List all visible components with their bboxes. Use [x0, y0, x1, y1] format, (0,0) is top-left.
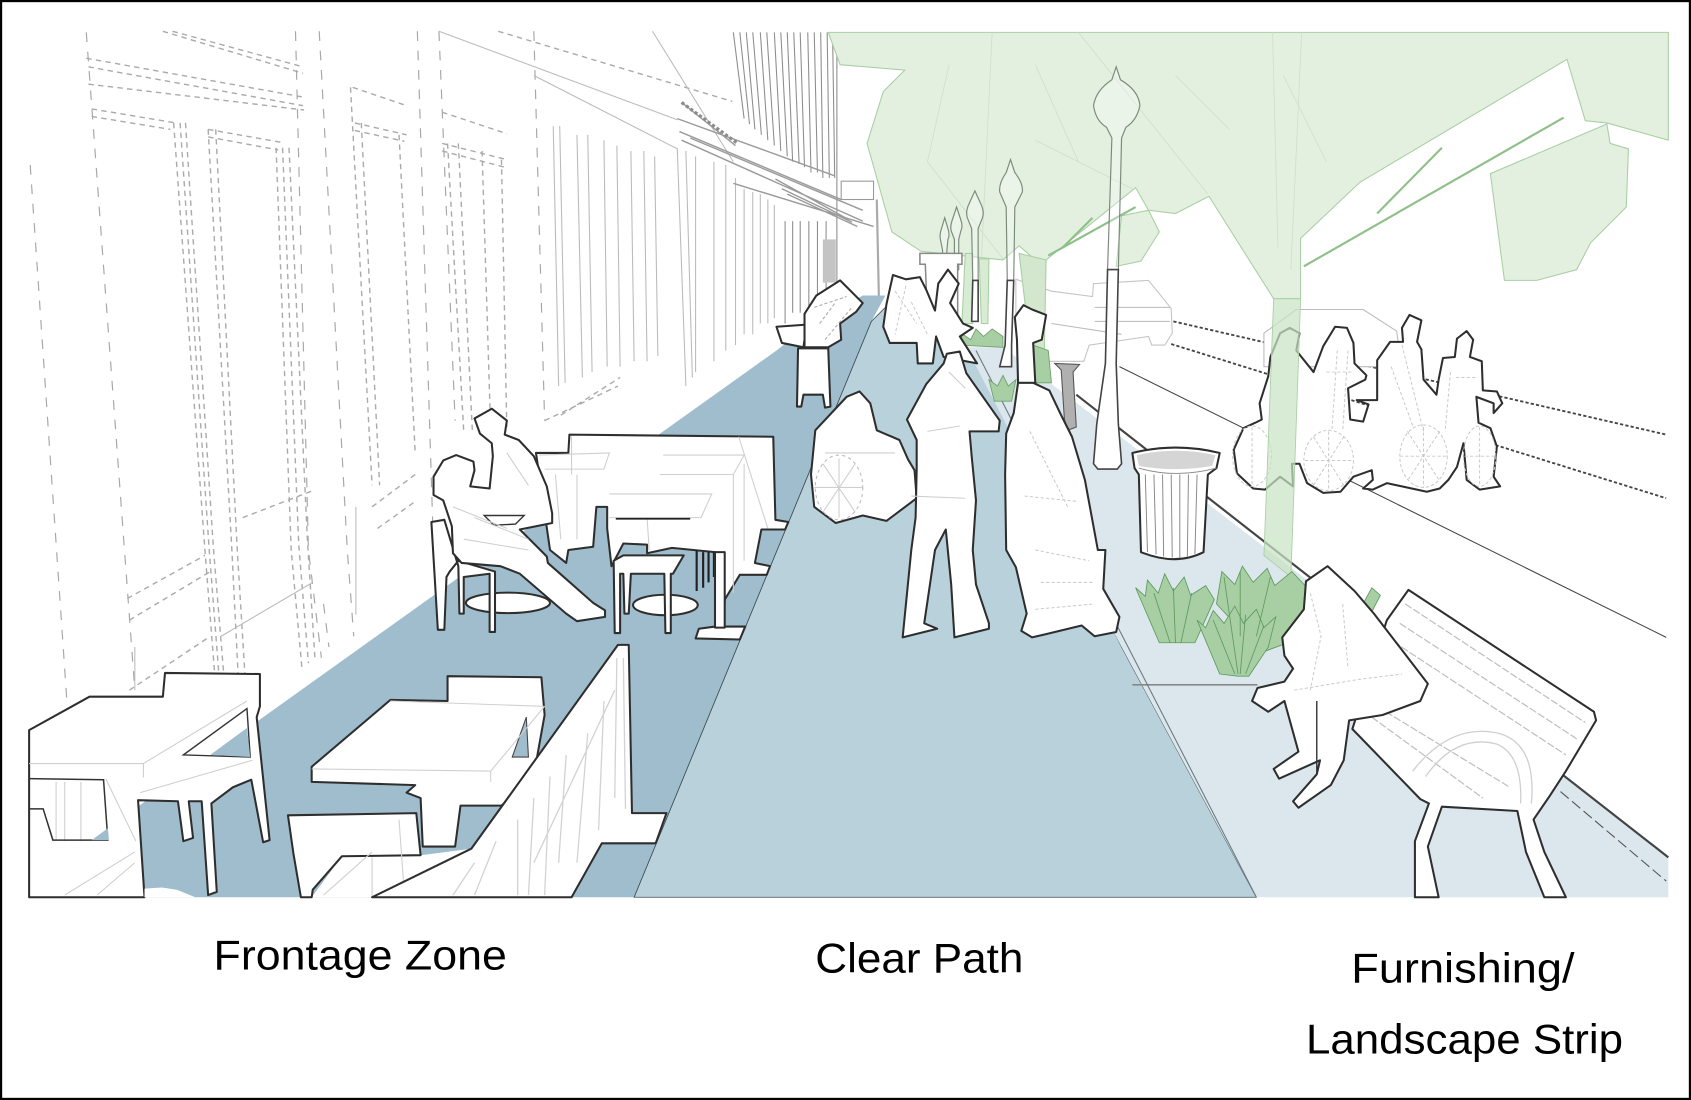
information kiosk [920, 253, 962, 318]
clear path ground [634, 307, 1256, 897]
roadway lane lines [1119, 321, 1666, 637]
outdoor table right with chairs [288, 676, 545, 897]
label: Furnishing / Landscape Strip: Furnishing/ [1351, 944, 1575, 991]
woman with stroller [1005, 383, 1119, 637]
cyclist group [1233, 315, 1502, 493]
person in wheelchair [811, 391, 917, 523]
cafe seating pair [431, 409, 605, 632]
cafe table barrier and furniture [536, 435, 788, 640]
distant pedestrians [776, 270, 977, 408]
label: Clear Path: Clear Path [815, 935, 1023, 982]
lamp posts lower [972, 270, 1122, 469]
tree canopies [828, 32, 1668, 372]
standing man [903, 352, 1000, 637]
label: Frontage Zone: Frontage Zone [214, 932, 507, 979]
tree trunk overlay [1264, 299, 1301, 577]
label: Furnishing / Landscape Strip [1306, 944, 1623, 1063]
bollard and bag [1055, 363, 1080, 430]
building facades [30, 31, 879, 755]
label: Furnishing / Landscape Strip: Landscape Strip [1306, 1016, 1623, 1063]
outdoor table left with chair [29, 673, 270, 897]
furnishing strip ground [966, 347, 1668, 897]
seated person on bench [1252, 566, 1428, 808]
glass cafe barrier [372, 645, 666, 897]
small pedestrian with raised arms [1015, 305, 1046, 383]
curb lines [976, 350, 1668, 897]
frontage zone ground [97, 295, 885, 897]
planting at far end [958, 329, 1051, 401]
park bench [1352, 590, 1596, 897]
planting bushes [1136, 566, 1380, 676]
illustration: street perspective [29, 31, 1668, 897]
trash can [1132, 448, 1220, 559]
parked cars [1016, 279, 1402, 367]
street lamps [940, 67, 1140, 280]
